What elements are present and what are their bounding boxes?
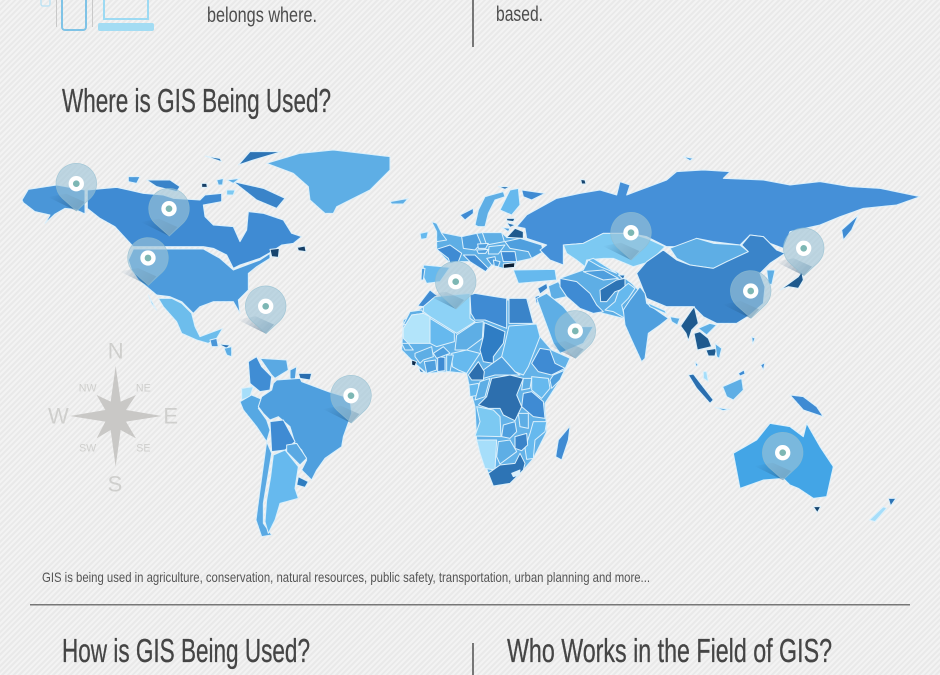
compass: NW [79,382,97,394]
map: russia, china, oceania [517,157,920,522]
compass: N [108,338,124,363]
map: africa [402,293,570,486]
compass: NE [136,382,151,394]
pin: canada [141,188,189,236]
pin: western usa [120,238,168,285]
pin: kazakhstan [603,212,651,260]
heading: how: How is GIS Being Used? [62,632,310,669]
compass: SW [79,442,97,454]
map: americas [22,150,408,537]
pin: brazil [323,375,371,423]
pin: china [722,271,771,318]
compass: W [48,404,69,429]
world map [22,150,920,537]
map: south and southeast asia [560,258,745,411]
compass: E [163,404,178,429]
map: europe [418,187,567,307]
map pins [48,163,824,480]
compass [48,338,178,497]
pin: caribbean [237,286,286,334]
pin: australia [754,432,803,480]
icon: devices [41,0,154,31]
heading: where: Where is GIS Being Used? [62,82,331,119]
pin: arabia [547,311,596,358]
pin: alaska [48,163,97,211]
compass: SE [136,442,150,454]
compass: S [108,472,122,497]
pin: north africa [427,261,476,309]
text block: based: based. [496,3,543,26]
text block: belongs where: belongs where. [207,4,317,27]
pin: east russia [775,228,824,276]
caption: GIS is being used in agriculture, conservation, natural resources, public safety, transportation, urban planning and more... [42,569,650,585]
